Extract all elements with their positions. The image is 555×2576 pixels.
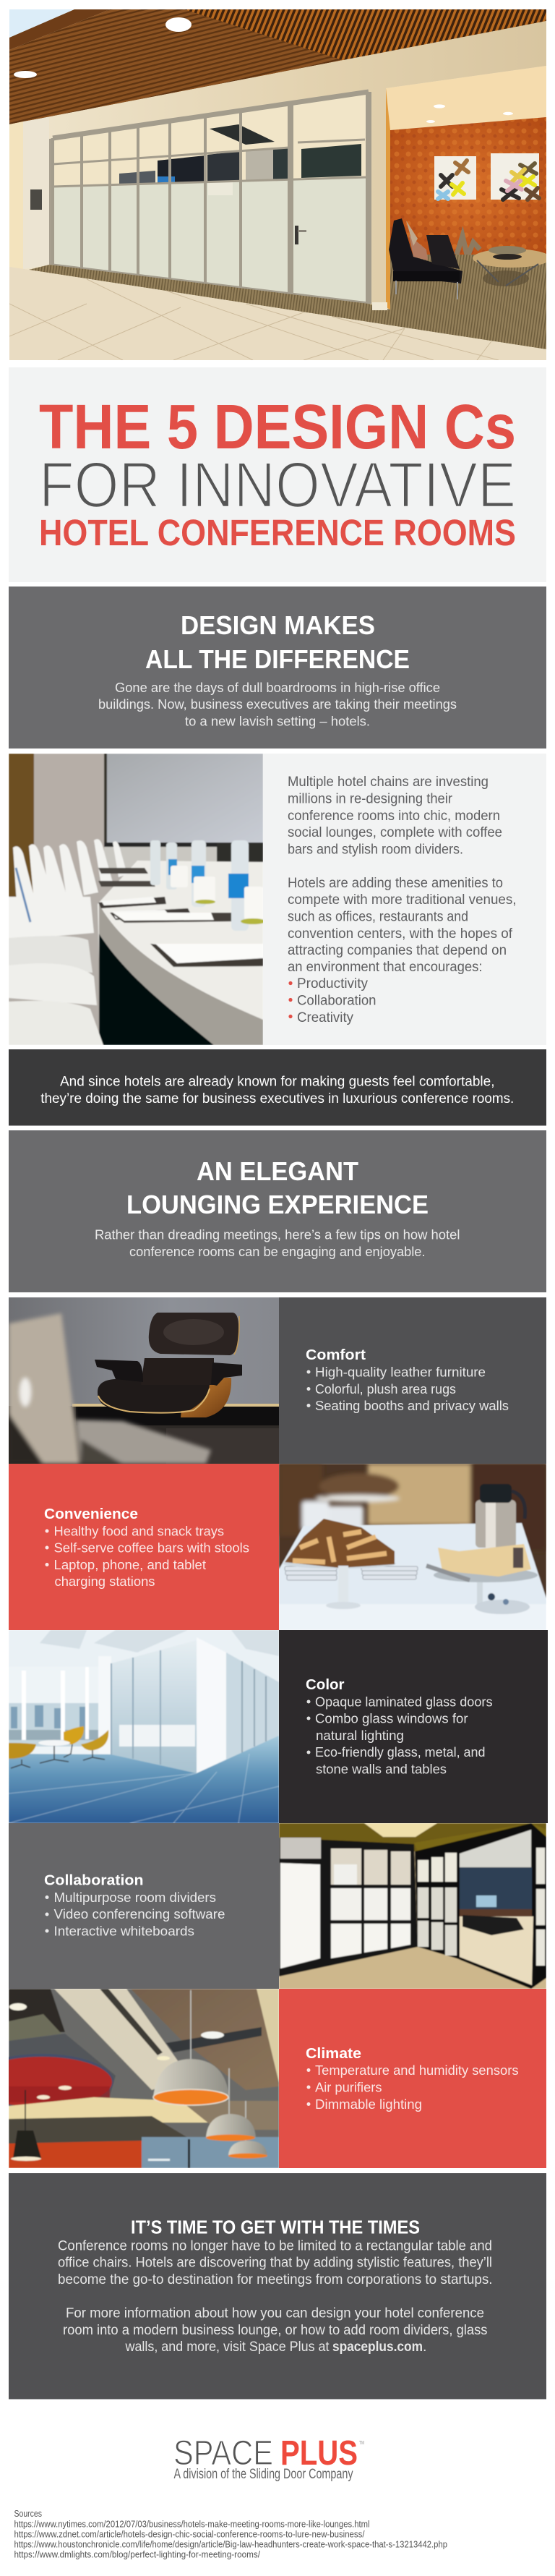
logo: Space Plus: A division of the Sliding Door Company [173, 2467, 353, 2482]
intro text [98, 680, 457, 729]
panel: convenience: Laptop, phone, and tablet [53, 1557, 206, 1572]
sources: Sources [14, 2509, 42, 2519]
panel: hotel amenities text: compete with more traditional venues, [288, 892, 516, 908]
bulleted list: Creativity [297, 1010, 353, 1025]
sliding glass doors [49, 92, 371, 304]
panel: climate: Climate [306, 2046, 361, 2062]
panel: hotel amenities text: such as offices, restaurants and [288, 910, 468, 924]
callout: hotels comfort: And since hotels are already known for making guests feel comfortable, [60, 1073, 494, 1089]
sources: https://www.nytimes.com/2012/07/03/business/hotels-make-meeting-rooms-more-like-lounges.html [14, 2520, 370, 2530]
coffee table [457, 236, 551, 286]
lounge sofa [389, 218, 462, 299]
photo: hotel boardroom table [9, 754, 265, 1045]
intro text: Rather than dreading meetings, here’s a few tips on how hotel [95, 1227, 460, 1242]
heading [126, 1156, 429, 1219]
heading: AN ELEGANT [197, 1156, 358, 1186]
heading: IT’S TIME TO GET WITH THE TIMES [131, 2216, 420, 2238]
panel: hotel amenities text: conference rooms into chic, modern [288, 809, 500, 824]
logo: Space Plus: PLUS [280, 2434, 358, 2473]
panel: hotel amenities text [263, 754, 546, 1045]
panel: color: Eco-friendly glass, metal, and [315, 1744, 486, 1760]
title panel [9, 367, 546, 582]
panel: convenience: Self-serve coffee bars with stools [53, 1540, 249, 1555]
panel: collaboration: Multipurpose room dividers [53, 1890, 216, 1905]
intro text: Gone are the days of dull boardrooms in high-rise office [115, 680, 440, 695]
panel: convenience [9, 1464, 279, 1630]
intro text: conference rooms can be engaging and enjoyable. [129, 1244, 425, 1259]
intro text [95, 1227, 460, 1259]
pendant lamps [11, 1990, 267, 2161]
panel: an elegant lounging experience [9, 1130, 546, 1292]
closing text: . [423, 2339, 426, 2355]
panel: hotel amenities text: Hotels are adding these amenities to [288, 876, 503, 891]
cheese plate [426, 1544, 538, 1614]
bulleted list: Productivity [297, 976, 368, 991]
panel: comfort: High-quality leather furniture [315, 1364, 486, 1380]
white chairs [9, 839, 127, 1045]
panel: climate: Air purifiers [315, 2080, 382, 2094]
photo: glass-walled office [9, 1630, 279, 1823]
logo: Space Plus: TM [359, 2441, 364, 2446]
panel: collaboration: Interactive whiteboards [53, 1924, 194, 1938]
panel: convenience: Convenience [44, 1506, 138, 1522]
panel: hotel amenities text: attracting companies that depend on [288, 943, 507, 958]
photo: leather lounge chair [9, 1297, 279, 1464]
chair [95, 1313, 242, 1417]
heading: LOUNGING EXPERIENCE [126, 1190, 429, 1219]
panel: hotel amenities text: social lounges, complete with coffee [288, 825, 502, 840]
callout: hotels comfort [9, 1049, 546, 1125]
photo: black-framed glass walls [279, 1823, 546, 1989]
bottles and cups [150, 840, 265, 931]
closing text: For more information about how you can design your hotel conference [66, 2306, 484, 2321]
heading: ALL THE DIFFERENCE [145, 644, 410, 674]
intro text: buildings. Now, business executives are taking their meetings [98, 696, 457, 712]
logo: Space Plus: SPACE [173, 2434, 273, 2473]
panel: hotel amenities text: convention centers, with the hopes of [288, 926, 513, 942]
closing text: office chairs. Hotels are discovering that by adding stylistic features, they’ll [58, 2255, 492, 2271]
panel: convenience: charging stations [55, 1574, 155, 1589]
hero photo: glass room dividers in hotel lobby [9, 9, 551, 360]
panel: climate: Dimmable lighting [315, 2097, 422, 2112]
bulleted list [288, 976, 376, 1025]
panel: color: stone walls and tables [316, 1762, 447, 1776]
panel: color: Color [306, 1677, 345, 1693]
intro text: to a new lavish setting – hotels. [185, 713, 370, 729]
notepads [98, 868, 263, 967]
right room through the doorway [415, 1823, 546, 1989]
panel: color: Opaque laminated glass doors [315, 1694, 493, 1710]
closing text [58, 2238, 493, 2355]
sources: https://www.dmlights.com/blog/perfect-lighting-for-meeting-rooms/ [14, 2550, 260, 2560]
red ceiling disc [9, 2054, 113, 2106]
alcove with orange feature wall [386, 66, 546, 310]
pastry stand [283, 1519, 418, 1609]
panel: it's time to get with the times [9, 2173, 546, 2400]
sources [14, 2509, 447, 2560]
closing text: Conference rooms no longer have to be limited to a rectangular table and [58, 2238, 492, 2253]
sources: https://www.zdnet.com/article/hotels-design-chic-social-conference-rooms-to-lure-new-business/ [14, 2530, 365, 2540]
thermos [476, 1484, 525, 1548]
panel: collaboration: Collaboration [44, 1873, 143, 1889]
panel: comfort: Seating booths and privacy walls [315, 1398, 509, 1413]
heading [145, 610, 410, 674]
photo: pendant lights on ceiling [0, 1989, 279, 2168]
panel: comfort [279, 1297, 546, 1464]
panel: collaboration [9, 1823, 279, 1989]
panel: color: Combo glass windows for [315, 1711, 468, 1726]
panel: color: natural lighting [316, 1728, 404, 1743]
panel: comfort: Colorful, plush area rugs [315, 1381, 456, 1396]
panel: climate: Temperature and humidity sensors [315, 2063, 519, 2078]
panel: design makes all the difference [9, 587, 546, 749]
panel: hotel amenities text: millions in re-designing their [288, 791, 453, 807]
panel: comfort: Comfort [306, 1347, 366, 1363]
bulleted list: Collaboration [297, 994, 376, 1008]
panel: hotel amenities text: bars and stylish room dividers. [288, 842, 463, 858]
panel: collaboration: Video conferencing software [53, 1906, 225, 1922]
closing text: walls, and more, visit Space Plus at [125, 2339, 330, 2355]
yellow chairs [9, 1726, 108, 1768]
closing text: spaceplus.com [332, 2339, 423, 2355]
panel: color [279, 1630, 548, 1823]
logo: Space Plus [173, 2434, 364, 2482]
photo: coffee bar with snack trays [279, 1464, 546, 1630]
closing text: room into a modern business lounge, or how to add room dividers, glass [63, 2322, 488, 2338]
panel: climate [279, 1989, 546, 2168]
closing text: become the go-to destination for meetings from corporations to startups. [58, 2272, 493, 2287]
sources: https://www.houstonchronicle.com/life/home/design/article/Big-law-headhunters-create-work-space-that-s-13213442.php [14, 2540, 447, 2550]
callout: hotels comfort: they’re doing the same for business executives in luxurious conference rooms. [40, 1091, 514, 1106]
panel: hotel amenities text: Multiple hotel chains are investing [288, 775, 489, 790]
heading: DESIGN MAKES [181, 610, 375, 640]
panel: hotel amenities text: an environment that encourages: [288, 960, 483, 975]
panel: convenience: Healthy food and snack trays [53, 1523, 224, 1539]
